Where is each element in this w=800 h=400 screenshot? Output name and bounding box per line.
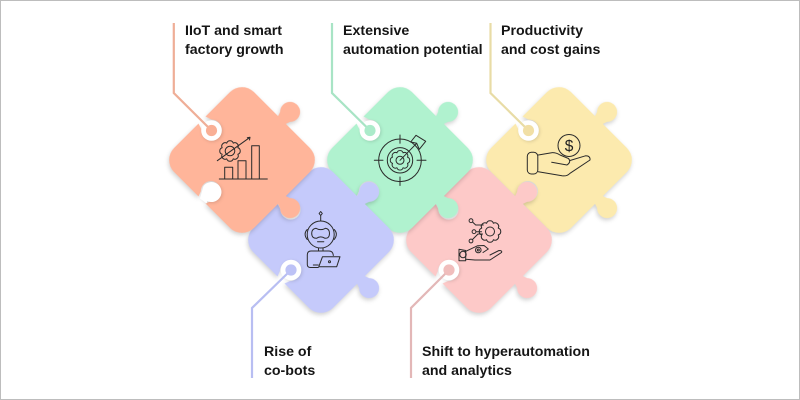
icon: bar chart with gear	[217, 137, 267, 179]
panel: yellow puzzle piece	[479, 65, 669, 255]
connector: pink	[411, 264, 455, 378]
ring: pink	[439, 260, 459, 280]
connector: purple	[252, 264, 297, 378]
icon: robot with laptop	[305, 212, 340, 268]
label: Extensive automation potential: Extensive	[343, 23, 409, 39]
panel: green puzzle piece	[320, 65, 510, 255]
icon: target with gear and arrow	[374, 135, 426, 186]
panel: pink puzzle piece	[399, 145, 589, 335]
label: Productivity and cost gains: and cost gains	[501, 42, 600, 58]
label: IIoT and smart factory growth: IIoT and smart	[185, 23, 282, 39]
ring: orange	[201, 120, 222, 141]
icon: hand holding dollar coin: $	[565, 138, 574, 155]
ring: green	[360, 120, 380, 141]
label: Extensive automation potential: automation potential	[343, 42, 483, 58]
label: Rise of co-bots: co-bots	[264, 363, 315, 379]
icon: hand holding dollar coin	[527, 134, 590, 176]
icon: robotic hand with gear circuit	[459, 219, 502, 261]
notch: orange lower left	[200, 182, 221, 204]
connector: orange	[174, 23, 217, 136]
panel: orange puzzle piece	[162, 65, 352, 255]
label: IIoT and smart factory growth: factory growth	[185, 42, 284, 58]
ring: purple	[281, 260, 301, 280]
label: Shift to hyperautomation and analytics: and analytics	[422, 363, 512, 379]
panel: purple puzzle piece	[241, 145, 431, 335]
label: Shift to hyperautomation and analytics: Shift to hyperautomation	[422, 344, 590, 360]
label: Productivity and cost gains: Productivity	[501, 23, 583, 39]
label: Rise of co-bots: Rise of	[264, 344, 311, 360]
connector: yellow	[490, 23, 534, 136]
ring: yellow	[518, 120, 539, 141]
connector: green	[332, 23, 376, 136]
